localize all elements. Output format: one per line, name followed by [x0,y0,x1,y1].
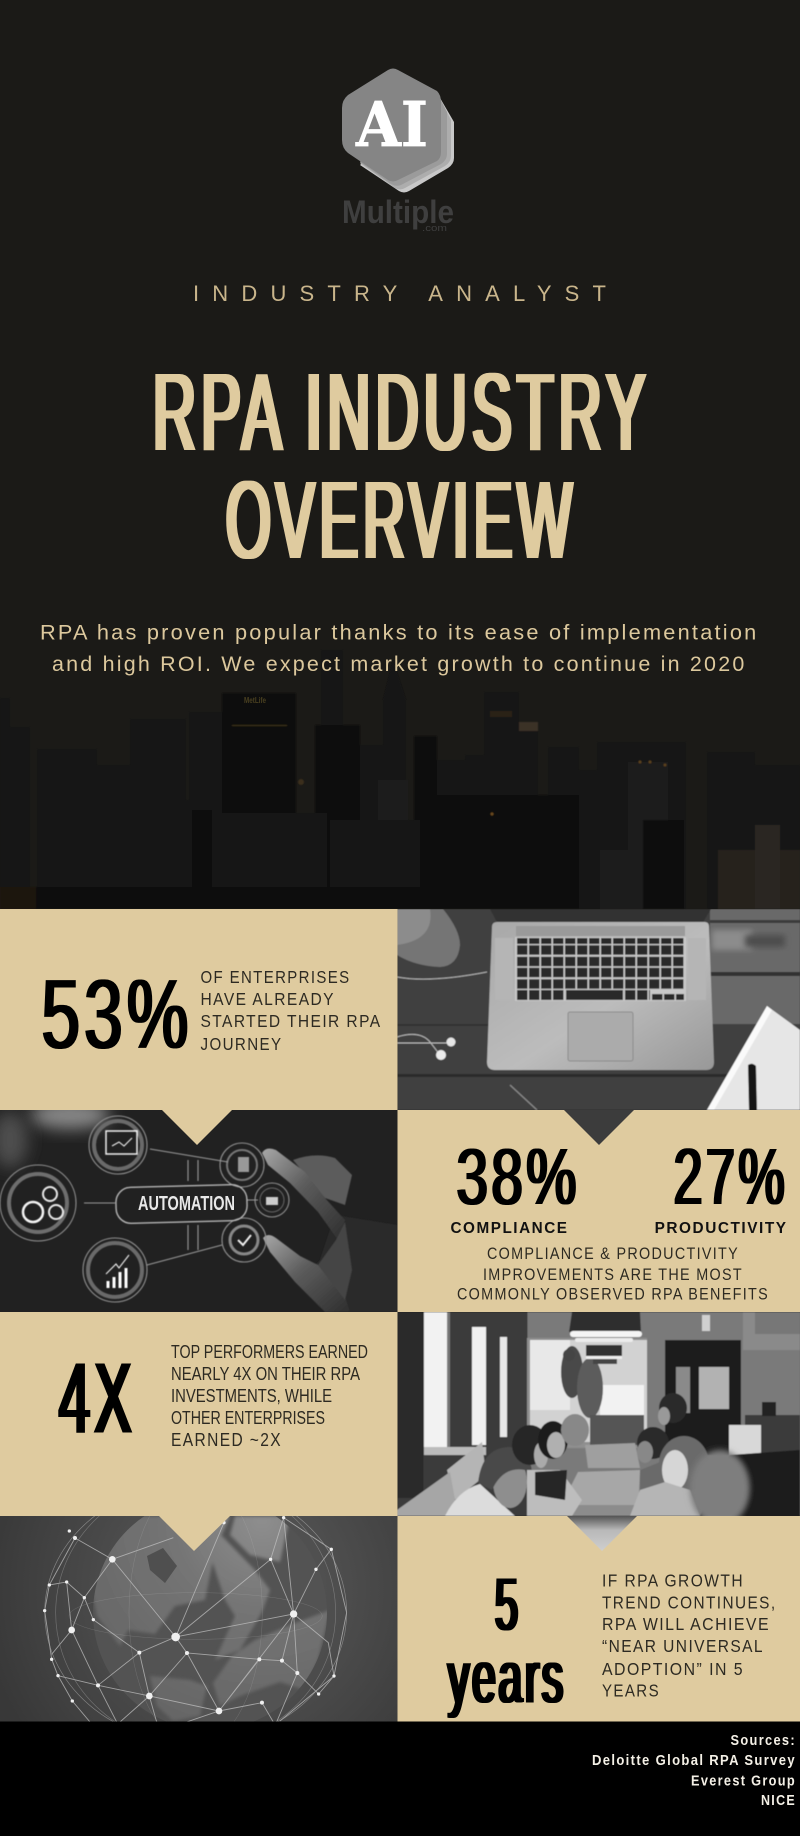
panel: 53 percent [0,909,398,1110]
automation pill [116,1184,247,1224]
description: STARTED THEIR RPA [200,1011,382,1031]
stat 4X: 4X [59,1342,136,1454]
logo [342,68,454,233]
label compliance: COMPLIANCE [450,1220,568,1237]
description [457,1245,769,1304]
description: NEARLY 4X ON THEIR RPA [171,1364,360,1384]
gears circle [0,1165,76,1241]
description: TOP PERFORMERS EARNED [171,1342,368,1362]
description: COMPLIANCE & PRODUCTIVITY [487,1245,739,1263]
description: “NEAR UNIVERSAL [602,1636,764,1656]
footer: sources [0,1722,800,1836]
notch [162,1110,232,1145]
people [445,1484,515,1516]
people circle [255,1183,289,1217]
description: OF ENTERPRISES [200,967,350,987]
notch [159,1516,230,1551]
description [602,1570,776,1700]
skyline photo [0,650,800,909]
tables [571,1470,640,1506]
description: RPA WILL ACHIEVE [602,1614,770,1634]
greenland and europe land [205,1536,270,1660]
network lines [42,1516,348,1722]
panel: 4X [0,1312,398,1516]
title [153,351,651,582]
stat 5: 5 [495,1563,518,1646]
logo wordmark: Multiple [342,194,454,230]
hand [262,1149,397,1312]
photo: restaurant [397,1312,800,1526]
hero background [0,0,800,909]
stat 38%: 38% [456,1132,580,1221]
description: YEARS [602,1680,660,1700]
description: EARNED ~2X [171,1430,282,1450]
hudson bay [147,1548,177,1583]
automation diagram [0,1116,289,1302]
eyebrow: industry analyst: INDUSTRY ANALYST [193,281,606,306]
background glow [30,1101,110,1129]
intro line 2: and high ROI. We expect market growth to continue in 2020 [52,652,746,676]
globe disc [93,1580,280,1722]
photo: laptop on desk [397,909,800,1110]
logo back layers [360,91,454,192]
description: ADOPTION” IN 5 [602,1659,744,1679]
south america land [150,1676,207,1721]
chart circle [83,1238,147,1302]
description: OTHER ENTERPRISES [171,1408,325,1428]
connector lines [84,1149,258,1265]
check circle [222,1218,266,1262]
notch [564,1110,634,1145]
north america land [90,1516,230,1646]
notch [567,1516,637,1551]
network nodes [43,1516,336,1714]
stat 53%: 53% [42,959,192,1069]
logo front hexagon [342,68,441,182]
panel: 5 years [398,1516,800,1722]
skyline sign: MetLife [244,696,266,705]
description: HAVE ALREADY [200,989,335,1009]
description: IMPROVEMENTS ARE THE MOST [483,1266,743,1284]
panel: compliance and productivity [398,1110,800,1312]
monitor circle [89,1116,147,1174]
booth seats [447,1442,486,1500]
intro paragraph [40,620,758,676]
panel: automation photo [0,1101,398,1312]
label productivity: PRODUCTIVITY [655,1220,788,1237]
description: IF RPA GROWTH [602,1570,744,1590]
automation label: AUTOMATION [138,1193,235,1215]
description: TREND CONTINUES, [602,1592,776,1612]
africa land [213,1610,330,1706]
logo domain: .com [422,223,447,233]
stat years: years [448,1636,566,1718]
sources list [592,1733,796,1809]
description: INVESTMENTS, WHILE [171,1386,332,1406]
description [200,967,382,1054]
panel: globe photo [0,1516,398,1722]
description: JOURNEY [200,1034,282,1054]
description [171,1342,368,1450]
intro line 1: RPA has proven popular thanks to its ease of implementation [40,620,758,644]
logo letters AI: AI [355,88,428,161]
document circle [220,1143,264,1187]
continents [90,1516,330,1721]
